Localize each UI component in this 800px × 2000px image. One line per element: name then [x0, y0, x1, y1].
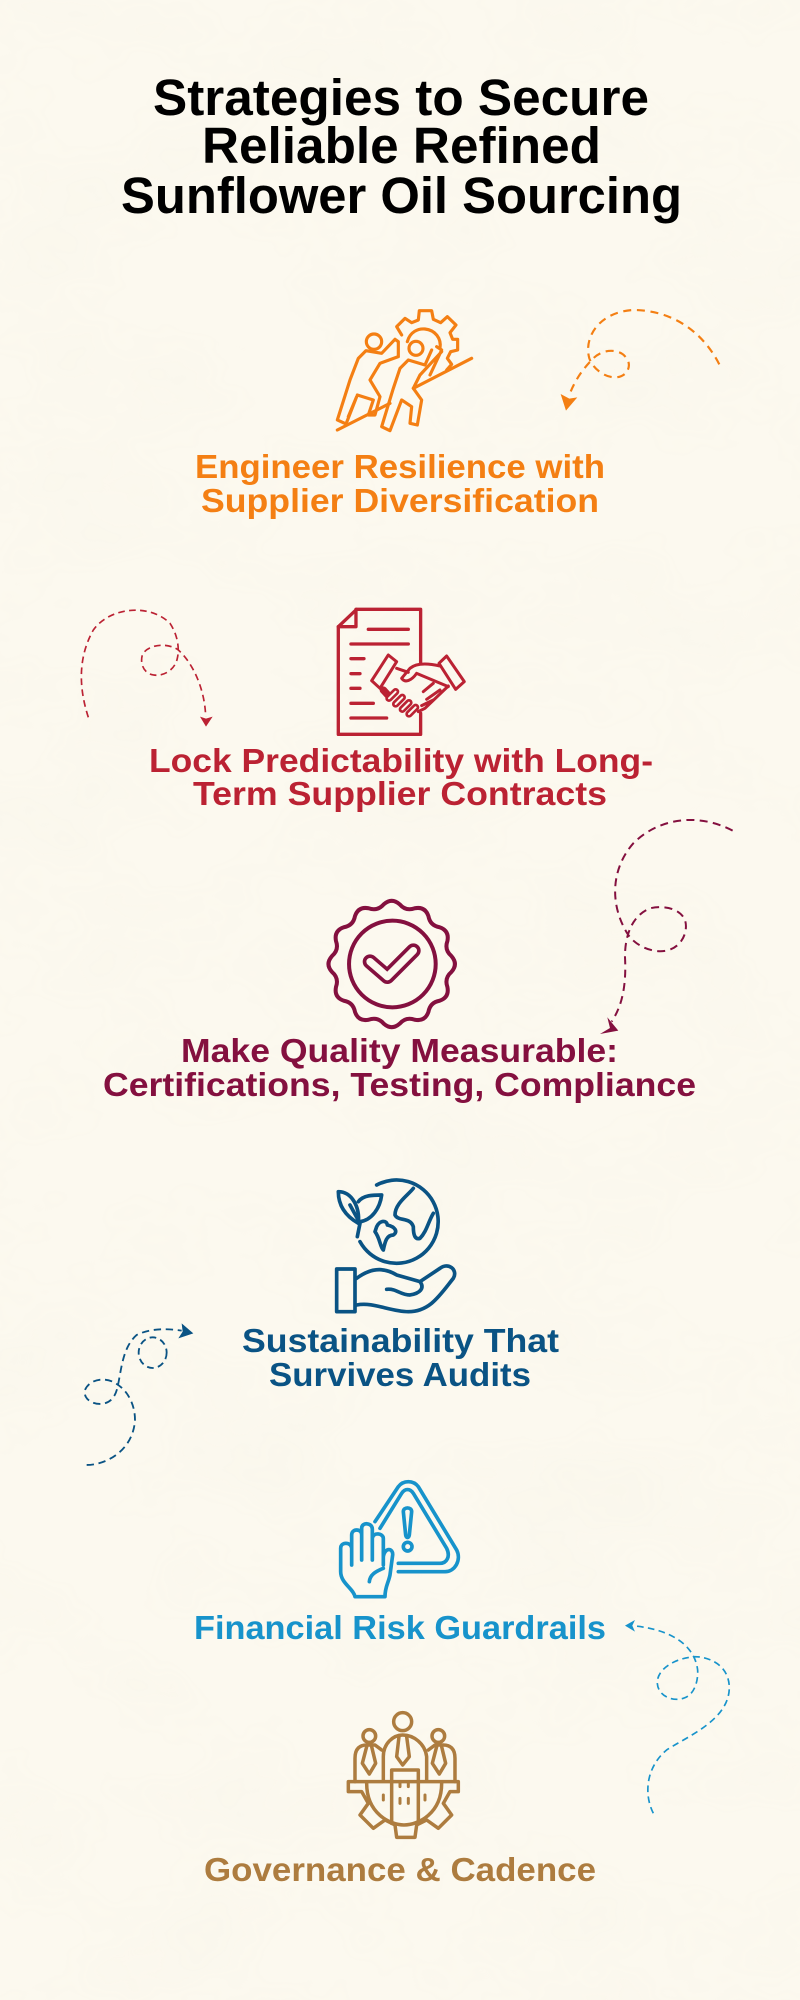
arrow: maroon dashed loop	[600, 820, 733, 1034]
heading: long-term contracts: Term Supplier Contracts	[193, 775, 607, 812]
arrow: orange dashed loop	[561, 310, 719, 411]
heading: sustainability: Survives Audits	[269, 1356, 531, 1393]
title: Reliable Refined	[202, 117, 601, 174]
title: Sunflower Oil Sourcing	[121, 167, 682, 224]
heading: sustainability: Sustainability That	[242, 1322, 559, 1359]
title: Strategies to Secure	[153, 69, 649, 126]
heading: quality measurable	[103, 1032, 696, 1103]
icon: globe, leaves and open hand	[337, 1180, 455, 1312]
heading: engineer resilience	[195, 448, 605, 519]
icon: governance team, building and gear	[348, 1713, 458, 1837]
heading: sustainability	[242, 1322, 559, 1393]
heading: quality measurable: Certifications, Testing, Compliance	[103, 1066, 696, 1103]
heading: engineer resilience: Supplier Diversification	[201, 482, 599, 519]
icon: certified seal with check	[328, 901, 455, 1027]
heading: governance: Governance & Cadence	[204, 1851, 596, 1888]
heading: financial risk: Financial Risk Guardrails	[194, 1609, 606, 1646]
heading: engineer resilience: Engineer Resilience with	[195, 448, 605, 485]
arrow: light blue dashed loop	[625, 1620, 729, 1813]
title	[121, 69, 682, 224]
heading: quality measurable: Make Quality Measurable:	[181, 1032, 618, 1069]
heading: long-term contracts: Lock Predictability with Long-	[149, 742, 653, 779]
arrow: red dashed loop	[81, 610, 213, 727]
icon: raised hand and warning triangle	[341, 1482, 458, 1597]
icon: contract with handshake	[338, 609, 464, 734]
arrow: navy dashed loops	[85, 1323, 193, 1465]
heading: long-term contracts	[149, 742, 653, 812]
icon: people pushing gear	[337, 311, 472, 431]
